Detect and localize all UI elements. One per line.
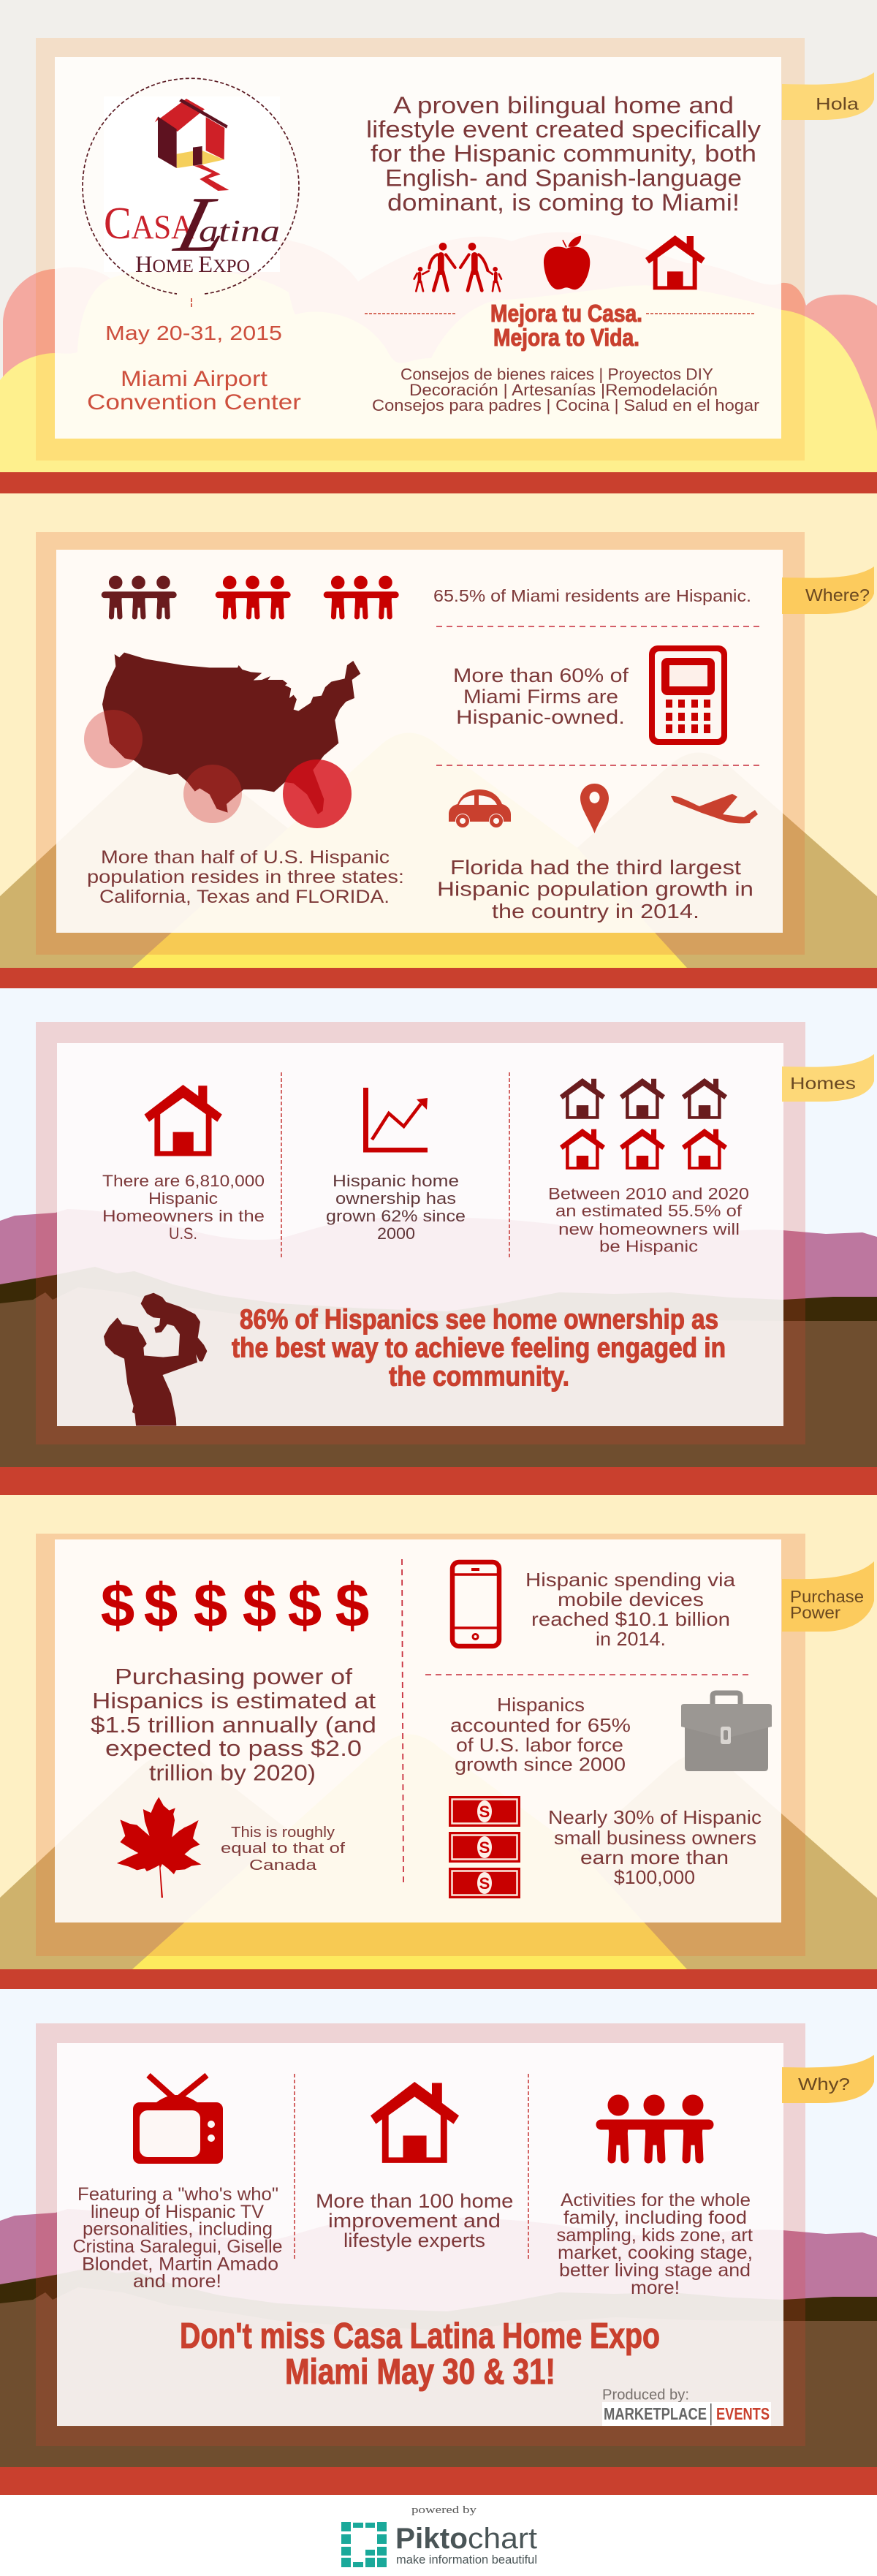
date and venue xyxy=(87,298,301,414)
icon: television xyxy=(133,2075,223,2164)
icon: three groups of people xyxy=(102,576,398,617)
text: experts: improvement and xyxy=(328,2210,501,2232)
text: small business: $100,000 xyxy=(614,1866,695,1888)
panel body xyxy=(57,1043,783,1426)
text: TV personalities: Cristina Saralegui, Giselle xyxy=(73,2237,282,2257)
text: purchasing power: expected to pass $2.0 xyxy=(105,1735,362,1761)
icon: car xyxy=(449,789,511,828)
tab: hola: Hola xyxy=(816,94,859,113)
text: homeowners: There are 6,810,000 xyxy=(102,1172,265,1190)
slogan: Mejora tu Casa. xyxy=(490,300,642,327)
text: purchasing power: trillion by 2020) xyxy=(149,1760,316,1785)
callout: don't miss: Miami May 30 & 31! xyxy=(285,2352,555,2392)
logo: Casa Latina Home Expo: L xyxy=(167,180,238,268)
icon: dollar signs: $ xyxy=(335,1571,369,1640)
text: purchasing power: Purchasing power of xyxy=(115,1664,352,1689)
text: labor force: of U.S. labor force xyxy=(456,1734,623,1756)
icon: bank notes: S xyxy=(479,1874,490,1893)
footer: powered by Piktochart xyxy=(0,2495,877,2576)
icon: bank notes: S xyxy=(479,1803,490,1821)
icon: map pin xyxy=(580,784,609,833)
credit: produced by xyxy=(602,2387,771,2426)
text: experts: More than 100 home xyxy=(316,2190,513,2212)
text: mobile spending: mobile devices xyxy=(558,1588,704,1610)
panel body xyxy=(55,1539,781,1922)
text: ownership growth: 2000 xyxy=(377,1224,415,1243)
footer: powered by Piktochart: powered by xyxy=(411,2504,477,2516)
icon: dollar signs xyxy=(101,1571,369,1640)
date and venue: May 20-31, 2015 xyxy=(105,322,282,344)
icon: dollar signs: $ xyxy=(194,1571,227,1640)
credit: produced by: EVENTS xyxy=(716,2404,770,2423)
text: homeowners: U.S. xyxy=(169,1224,197,1243)
tab: purchase power: Purchase xyxy=(790,1587,864,1606)
slogan: Mejora to Vida. xyxy=(493,324,639,351)
background: sky and mountains xyxy=(0,1495,877,1969)
red band xyxy=(0,968,877,988)
topics list: Decoración | Artesanías |Remodelación xyxy=(409,381,718,399)
icon: house xyxy=(645,235,705,289)
intro text: English- and Spanish-language xyxy=(385,165,742,192)
icon: briefcase xyxy=(681,1693,772,1771)
text: activities: more! xyxy=(631,2278,680,2298)
red band xyxy=(0,2467,877,2495)
text: purchasing power xyxy=(91,1664,376,1785)
text: small business: small business owners xyxy=(554,1827,756,1849)
date and venue: Miami Airport xyxy=(121,367,268,391)
credit: produced by: MARKETPLACE xyxy=(604,2404,707,2423)
text: three states xyxy=(87,847,404,907)
intro text: dominant, is coming to Miami! xyxy=(387,189,740,216)
panel body xyxy=(57,2043,783,2426)
text: Canada comparison: This is roughly xyxy=(231,1825,335,1841)
text: new homeowners: Between 2010 and 2020 xyxy=(548,1184,749,1203)
text: TV personalities: Blondet, Martin Amado xyxy=(82,2254,278,2275)
background: sky and hills xyxy=(0,0,877,472)
text: Florida growth: Hispanic population growth in xyxy=(437,877,753,901)
section: why xyxy=(0,1989,877,2495)
icon: bank notes xyxy=(449,1796,520,1898)
text: homeowners: Hispanic xyxy=(148,1189,218,1208)
icon: calculator xyxy=(649,645,727,745)
icon: Piktochart logo xyxy=(341,2522,387,2567)
section: hola xyxy=(0,0,877,493)
stat: Miami firms xyxy=(453,664,629,728)
text: Florida growth: Florida had the third largest xyxy=(450,856,741,879)
logo: Casa Latina Home Expo: atina xyxy=(199,215,280,249)
tab: where: Where? xyxy=(805,586,870,605)
map: United States with highlighted states xyxy=(84,653,360,828)
icon: house xyxy=(145,1085,222,1156)
text: new homeowners: new homeowners will xyxy=(558,1220,740,1238)
red band xyxy=(0,1467,877,1495)
panel frame xyxy=(36,2023,805,2446)
text: new homeowners: be Hispanic xyxy=(599,1237,698,1256)
icon: dollar signs: $ xyxy=(288,1571,322,1640)
tab: hola xyxy=(782,72,874,120)
text: TV personalities xyxy=(73,2184,282,2292)
tab: purchase power: Power xyxy=(790,1603,840,1622)
icon: house xyxy=(371,2082,459,2163)
logo: Casa Latina Home Expo: CASA xyxy=(104,199,194,249)
section: purchase power xyxy=(0,1495,877,1989)
text: Florida growth: the country in 2014. xyxy=(492,900,699,923)
text: activities: market, cooking stage, xyxy=(558,2243,753,2263)
icon: six houses xyxy=(560,1078,727,1170)
text: TV personalities: lineup of Hispanic TV xyxy=(91,2202,264,2222)
text: new homeowners xyxy=(548,1184,749,1256)
text: TV personalities: and more! xyxy=(133,2271,221,2292)
text: experts: lifestyle experts xyxy=(343,2230,485,2251)
text: homeowners: Homeowners in the xyxy=(102,1207,265,1225)
credit: produced by: Produced by: xyxy=(602,2387,689,2403)
stat: Miami residents: 65.5% of Miami residents are Hispanic. xyxy=(433,586,751,605)
tab: why xyxy=(782,2055,874,2103)
text: mobile spending: in 2014. xyxy=(596,1628,666,1650)
icon: people xyxy=(596,2095,713,2159)
logo: Casa Latina Home Expo: HOME EXPO xyxy=(135,251,250,277)
text: purchasing power: $1.5 trillion annually (and xyxy=(91,1712,376,1738)
text: mobile spending xyxy=(525,1569,736,1650)
icon: smartphone xyxy=(452,1562,499,1646)
icon: dollar signs: $ xyxy=(243,1571,276,1640)
text: Canada comparison xyxy=(221,1825,346,1874)
text: new homeowners: an estimated 55.5% of xyxy=(555,1202,743,1220)
topics list xyxy=(372,365,759,414)
footer: powered by Piktochart: Pikto xyxy=(395,2523,468,2555)
text: labor force: accounted for 65% xyxy=(450,1714,631,1736)
callout: don't miss xyxy=(180,2316,660,2392)
panel frame xyxy=(36,38,805,461)
date and venue: Convention Center xyxy=(87,390,301,414)
icon: family xyxy=(414,243,501,291)
intro text xyxy=(366,92,761,216)
intro text: for the Hispanic community, both xyxy=(371,140,756,167)
text: labor force xyxy=(450,1694,631,1775)
background: sky and mountains xyxy=(0,493,877,968)
callout: home ownership: the best way to achieve feeling engaged in xyxy=(232,1333,726,1364)
text: activities: sampling, kids zone, art xyxy=(557,2225,753,2246)
intro text: A proven bilingual home and xyxy=(393,92,734,118)
callout: home ownership: the community. xyxy=(389,1361,569,1392)
text: TV personalities: personalities, including xyxy=(83,2219,273,2240)
text: ownership growth: grown 62% since xyxy=(326,1207,466,1225)
stat: Miami firms: More than 60% of xyxy=(453,664,629,686)
topics list: Consejos para padres | Cocina | Salud en el hogar xyxy=(372,396,759,414)
text: Florida growth xyxy=(437,856,753,923)
text: three states: population resides in three states: xyxy=(87,867,404,887)
text: small business: Nearly 30% of Hispanic xyxy=(548,1806,762,1828)
background: sky and hills xyxy=(0,1989,877,2467)
text: ownership growth: ownership has xyxy=(335,1189,456,1208)
text: three states: California, Texas and FLORIDA. xyxy=(99,887,390,907)
footer: powered by Piktochart: chart xyxy=(468,2523,537,2555)
text: activities: better living stage and xyxy=(559,2260,751,2281)
tab: homes xyxy=(782,1054,874,1102)
tab: purchase power xyxy=(782,1561,874,1632)
text: TV personalities: Featuring a "who's who" xyxy=(77,2184,278,2205)
text: ownership growth: Hispanic home xyxy=(333,1172,459,1190)
icon: dollar signs: $ xyxy=(101,1571,134,1640)
icon: maple leaf xyxy=(117,1797,201,1898)
topics list: Consejos de bienes raices | Proyectos DIY xyxy=(400,365,713,383)
text: small business xyxy=(548,1806,762,1888)
text: Canada comparison: equal to that of xyxy=(221,1841,346,1857)
text: three states: More than half of U.S. Hispanic xyxy=(101,847,390,868)
text: small business: earn more than xyxy=(580,1846,729,1868)
logo: Casa Latina Home Expo xyxy=(83,78,299,294)
text: labor force: Hispanics xyxy=(497,1694,585,1716)
tab: homes: Homes xyxy=(790,1074,856,1093)
text: activities: family, including food xyxy=(563,2208,747,2228)
panel frame xyxy=(36,532,805,955)
section: where xyxy=(0,493,877,988)
panel body xyxy=(56,550,783,933)
text: purchasing power: Hispanics is estimated at xyxy=(92,1688,376,1713)
panel body xyxy=(55,57,781,439)
red band xyxy=(0,472,877,493)
icon: airplane xyxy=(671,794,758,823)
text: activities: Activities for the whole xyxy=(561,2190,751,2211)
text: activities xyxy=(557,2190,753,2298)
red band xyxy=(0,1969,877,1989)
text: experts xyxy=(316,2190,513,2251)
stat: Miami firms: Hispanic-owned. xyxy=(456,706,625,728)
tab: why: Why? xyxy=(798,2075,850,2094)
stat: Miami firms: Miami Firms are xyxy=(463,686,618,708)
callout: don't miss: Don't miss Casa Latina Home Expo xyxy=(180,2316,660,2356)
panel frame xyxy=(36,1534,805,1956)
panel frame xyxy=(36,1022,805,1444)
icon: bank notes: S xyxy=(479,1838,490,1857)
text: labor force: growth since 2000 xyxy=(455,1753,626,1775)
text: ownership growth xyxy=(326,1172,466,1243)
slogan xyxy=(365,300,754,351)
text: Canada comparison: Canada xyxy=(249,1857,317,1874)
callout: home ownership xyxy=(232,1304,726,1392)
intro text: lifestyle event created specifically xyxy=(366,116,761,143)
background: sky and hills xyxy=(0,988,877,1467)
text: mobile spending: Hispanic spending via xyxy=(525,1569,736,1591)
section: homes xyxy=(0,988,877,1495)
callout: home ownership: 86% of Hispanics see home ownership as xyxy=(240,1304,718,1335)
footer: powered by Piktochart: make information beautiful xyxy=(396,2553,537,2566)
icon: growth chart xyxy=(363,1088,428,1152)
text: homeowners xyxy=(102,1172,265,1243)
text: mobile spending: reached $10.1 billion xyxy=(531,1608,730,1630)
tab: where xyxy=(782,567,874,614)
icon: dollar signs: $ xyxy=(144,1571,178,1640)
icon: father lifting child xyxy=(105,1293,207,1425)
icon: apple xyxy=(544,236,590,289)
